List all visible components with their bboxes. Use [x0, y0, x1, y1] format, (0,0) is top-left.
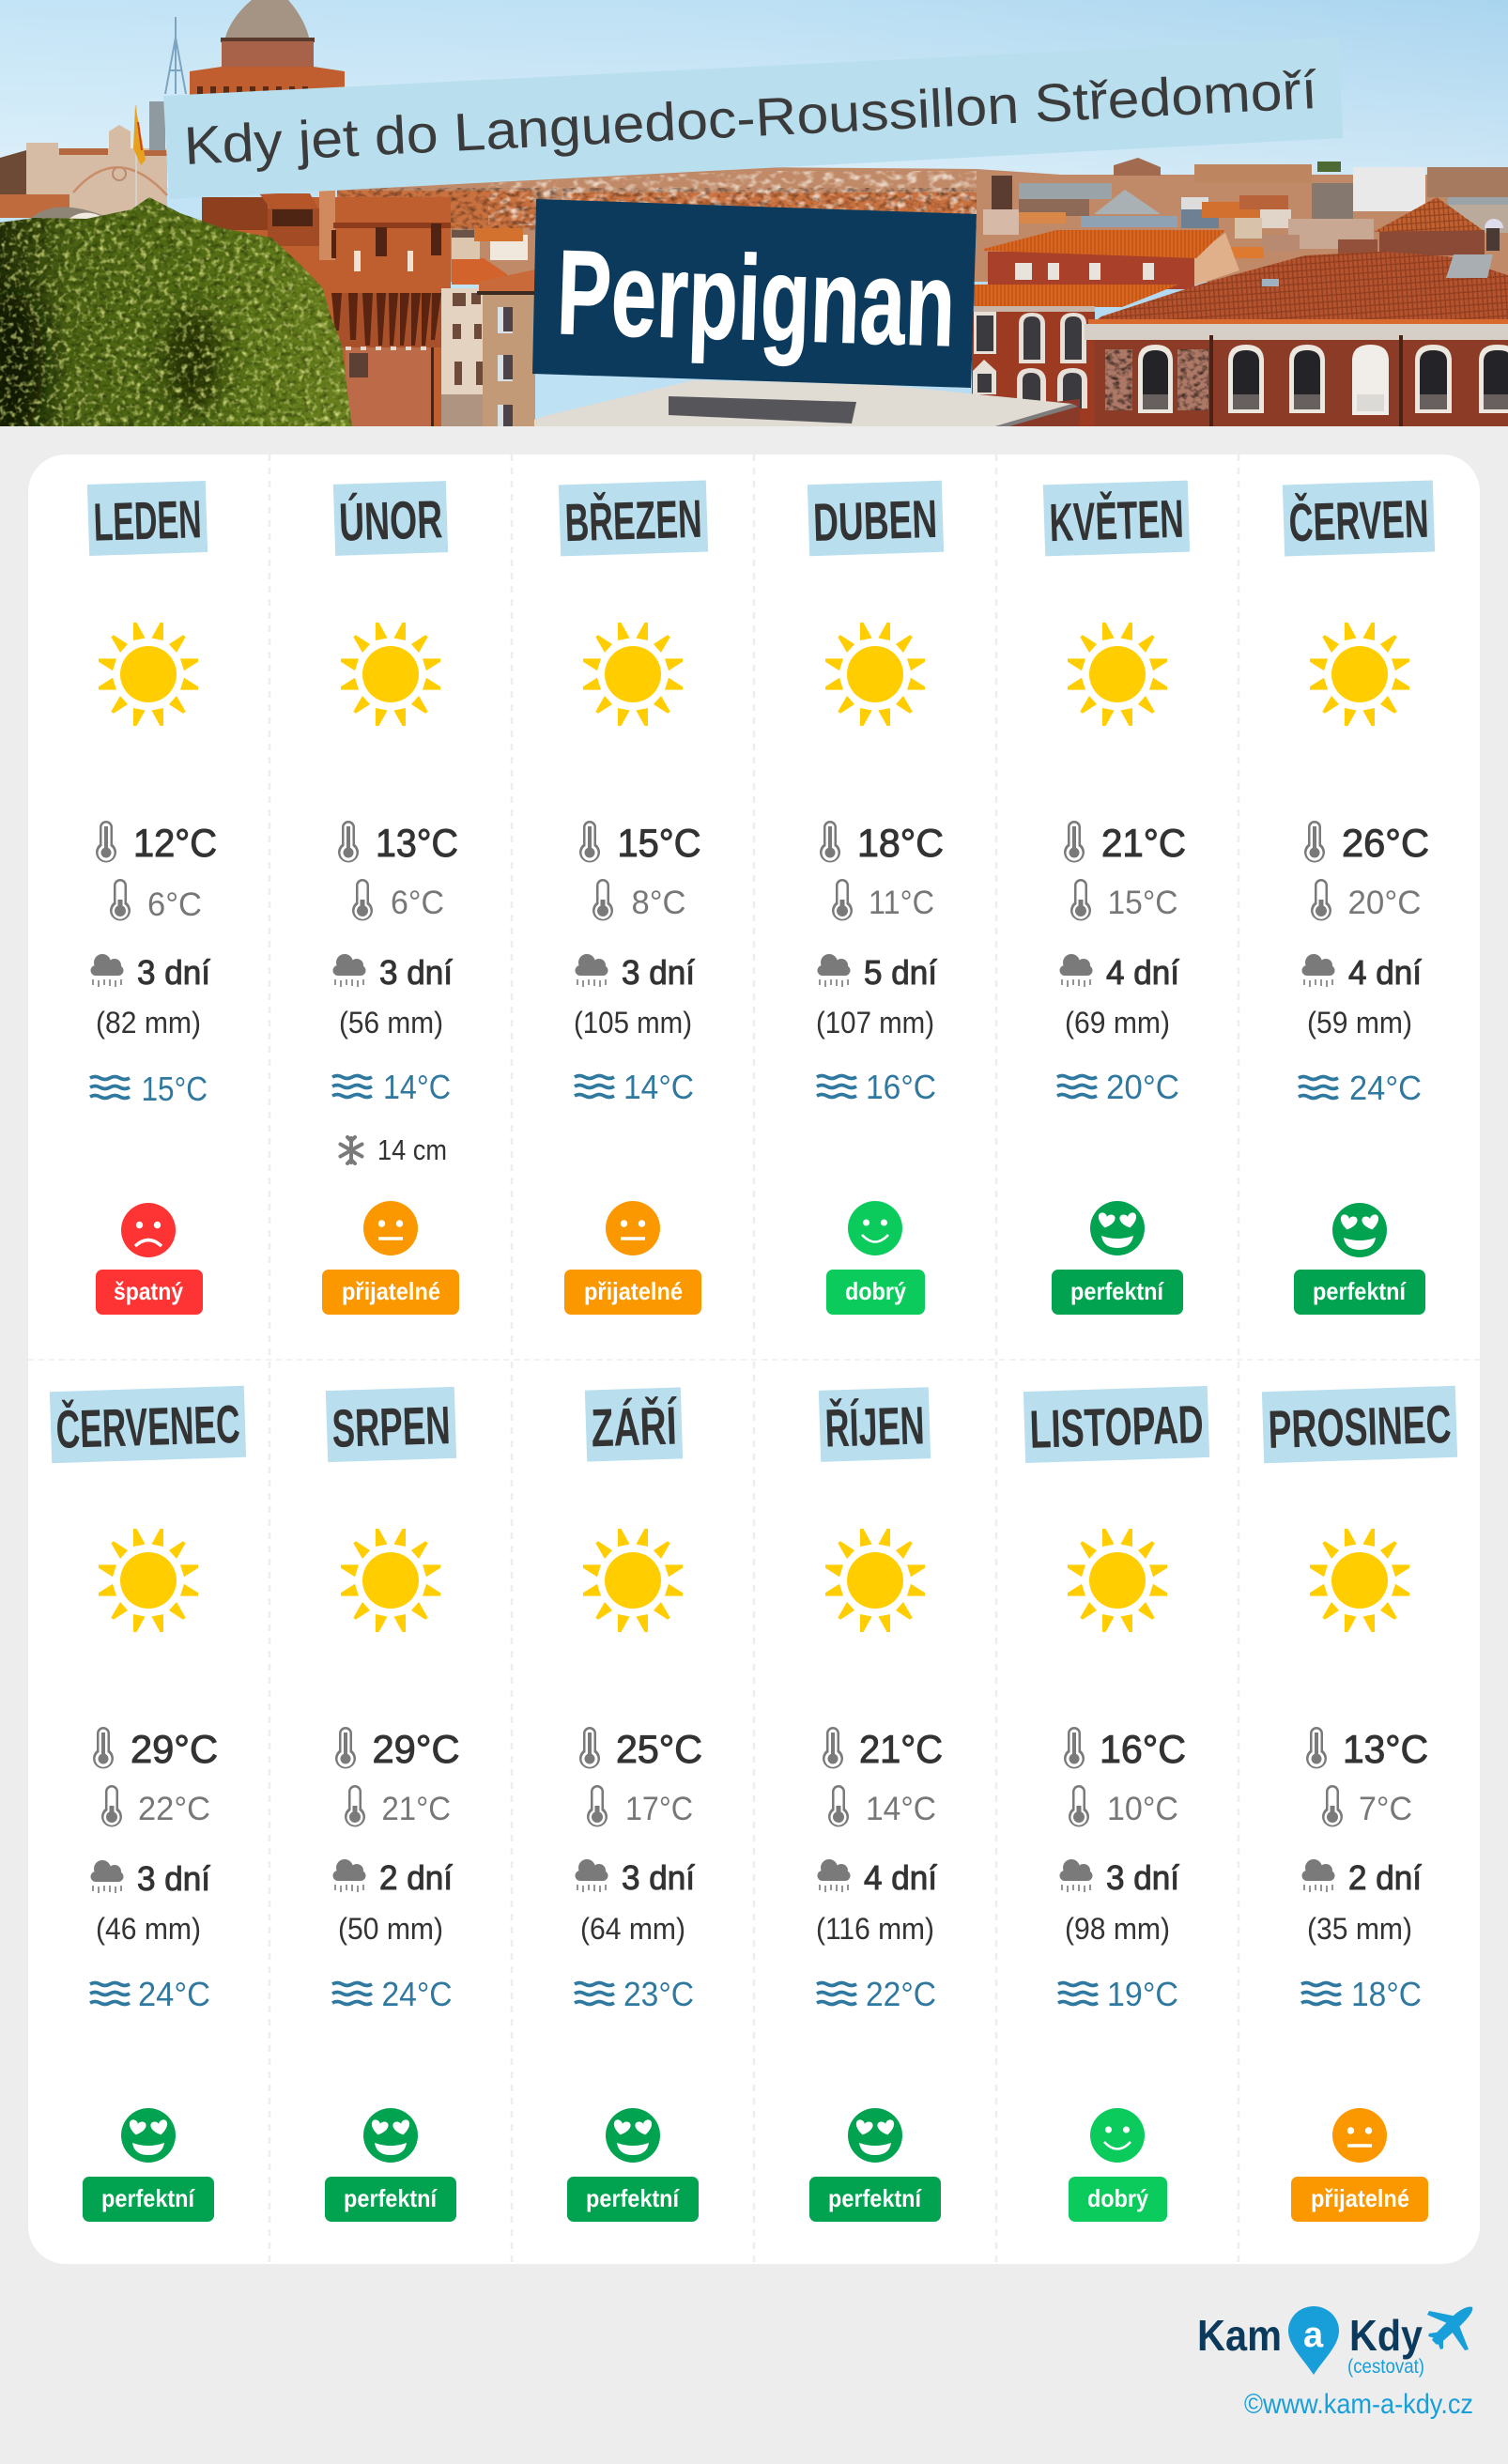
rating badge [1069, 2177, 1167, 2222]
rain days: 2 dní [379, 1858, 453, 1897]
rating badge [809, 2177, 941, 2222]
month: únor [322, 481, 459, 1315]
high temperature [823, 1727, 943, 1771]
rain days [90, 1859, 210, 1898]
rain days [1059, 953, 1179, 992]
low temperature [832, 879, 934, 921]
rain days: 5 dní [864, 953, 937, 992]
rating badge: přijatelné [342, 1277, 440, 1305]
rating badge [564, 1270, 701, 1315]
icon: sun [583, 623, 683, 726]
flat white roof [534, 380, 1080, 426]
icon: sun [825, 623, 925, 726]
sea temperature [817, 1068, 936, 1106]
subtitle banner [163, 38, 1343, 199]
smiley: neutral [1332, 2108, 1387, 2163]
icon: plane [1427, 2307, 1472, 2350]
heading: červenec: ČERVENEC [55, 1394, 241, 1460]
rain days [332, 1858, 453, 1897]
heading: říjen: ŘÍJEN [824, 1394, 926, 1459]
low temperature: 6°C [391, 885, 444, 921]
rating badge: perfektní [828, 2184, 922, 2212]
precipitation: (59 mm) [1307, 1006, 1412, 1040]
far town on the right skyline [983, 158, 1508, 261]
high temperature: 25°C [616, 1727, 702, 1771]
rain days: 3 dní [1106, 1858, 1179, 1897]
heading: únor: ÚNOR [338, 489, 443, 553]
sea temperature [1057, 1068, 1179, 1106]
rain days: 3 dní [137, 953, 210, 992]
sea temperature [1058, 1975, 1178, 2013]
low temperature: 20°C [1348, 885, 1422, 921]
precipitation: (69 mm) [1065, 1006, 1170, 1040]
month: červen [1283, 481, 1435, 1315]
castle wall [202, 191, 452, 426]
sea temperature: 24°C [138, 1975, 210, 2013]
sea temperature: 14°C [623, 1068, 694, 1106]
brick tower with dome [190, 0, 345, 98]
high temperature [1304, 821, 1429, 865]
icon: sun [341, 623, 440, 726]
rating badge: perfektní [586, 2184, 680, 2212]
precipitation: (46 mm) [96, 1912, 201, 1946]
rain days: 3 dní [622, 953, 695, 992]
icon: sun [341, 1529, 440, 1632]
sea temperature [1301, 1975, 1422, 2013]
rain days: 2 dní [1348, 1858, 1422, 1897]
month: duben [808, 481, 944, 1315]
rating badge [322, 1270, 459, 1315]
rain days [817, 953, 937, 992]
heading: duben: DUBEN [812, 489, 938, 553]
rating badge: přijatelné [1311, 2184, 1409, 2212]
smiley: good [1090, 2108, 1145, 2163]
low temperature: 7°C [1359, 1791, 1412, 1827]
rain days: 4 dní [1106, 953, 1179, 992]
heading: březen: BŘEZEN [564, 488, 703, 553]
sea temperature: 14°C [383, 1068, 451, 1106]
snow [340, 1133, 447, 1166]
high temperature [1306, 1727, 1428, 1771]
logo: Kam a Kdy: Kam [1197, 2311, 1282, 2360]
precipitation: (35 mm) [1307, 1912, 1412, 1946]
month: březen [559, 481, 708, 1315]
sea temperature: 19°C [1107, 1975, 1178, 2013]
orange roofs and brick buildings at right [972, 230, 1508, 426]
high temperature: 15°C [618, 821, 700, 865]
rating badge: dobrý [845, 1277, 906, 1305]
smiley: perfect [1090, 1201, 1145, 1255]
logo: Kam a Kdy: Kdy [1349, 2311, 1423, 2360]
heading: listopad [1023, 1386, 1209, 1463]
rating badge: perfektní [101, 2184, 195, 2212]
low temperature: 8°C [631, 885, 685, 921]
low temperature: 15°C [1108, 885, 1177, 921]
hero photo: Perpignan rooftops [0, 0, 1508, 441]
flag [133, 105, 146, 214]
icon: sun [1068, 623, 1167, 726]
low temperature [1069, 1785, 1178, 1827]
rain days: 3 dní [379, 953, 453, 992]
antenna [165, 17, 186, 94]
title banner: Perpignan [532, 199, 977, 388]
heading: září: ZÁŘÍ [591, 1395, 679, 1458]
rain days: 4 dní [1348, 953, 1422, 992]
low temperature: 21°C [381, 1791, 451, 1827]
high temperature: 29°C [372, 1727, 460, 1771]
high temperature: 16°C [1100, 1727, 1186, 1771]
sea temperature [332, 1975, 453, 2013]
rating badge: perfektní [1313, 1277, 1407, 1305]
high temperature [96, 821, 217, 865]
precipitation: (64 mm) [580, 1912, 685, 1946]
high temperature [579, 1727, 702, 1771]
rain days [575, 1858, 695, 1897]
heading: leden [87, 481, 208, 556]
month: prosinec [1262, 1386, 1457, 2222]
rain days [1301, 953, 1422, 992]
high temperature: 13°C [376, 821, 458, 865]
sea temperature: 18°C [1351, 1975, 1422, 2013]
rating badge [567, 2177, 699, 2222]
heading: březen [559, 481, 708, 556]
sea temperature: 22°C [866, 1975, 936, 2013]
smiley: perfect [606, 2108, 660, 2163]
rain days [817, 1858, 937, 1897]
website credit: ©www.kam-a-kdy.cz [1244, 2389, 1473, 2420]
month: červenec [50, 1386, 246, 2222]
low temperature: 11°C [869, 885, 934, 921]
low temperature [352, 879, 444, 921]
precipitation: (105 mm) [574, 1006, 692, 1040]
high temperature [579, 821, 700, 865]
low temperature [345, 1785, 451, 1827]
rating badge [1294, 1270, 1425, 1315]
rating badge: špatný [114, 1277, 183, 1305]
rain days [575, 953, 695, 992]
rain days [1301, 1858, 1422, 1897]
low temperature: 6°C [147, 886, 202, 923]
precipitation: (116 mm) [816, 1912, 934, 1946]
heading: květen [1043, 481, 1190, 556]
precipitation: (107 mm) [816, 1006, 934, 1040]
rating badge: perfektní [1070, 1277, 1164, 1305]
heading: květen: KVĚTEN [1049, 488, 1185, 553]
sea temperature: 24°C [381, 1975, 453, 2013]
sea temperature: 15°C [141, 1070, 208, 1108]
low temperature [1070, 879, 1177, 921]
low temperature [101, 1785, 210, 1827]
low temperature: 22°C [138, 1791, 210, 1827]
heading: červenec [50, 1386, 246, 1463]
high temperature: 26°C [1342, 821, 1429, 865]
sea temperature [1299, 1069, 1422, 1107]
rating badge [1052, 1270, 1183, 1315]
rating badge: perfektní [344, 2184, 438, 2212]
smiley: perfect [1332, 1203, 1387, 1257]
smiley: neutral [363, 1201, 418, 1255]
icon: sun [1310, 623, 1409, 726]
smiley: neutral [606, 1201, 660, 1255]
title banner: Perpignan: Perpignan [555, 225, 957, 372]
precipitation: (56 mm) [339, 1006, 443, 1040]
rating badge: přijatelné [584, 1277, 683, 1305]
icon: sun [99, 623, 198, 726]
icon: sun [1310, 1529, 1409, 1632]
rating badge [1291, 2177, 1428, 2222]
high temperature [335, 1727, 460, 1771]
rain days: 3 dní [622, 1858, 695, 1897]
heading: srpen: SRPEN [331, 1395, 452, 1459]
sea temperature: 16°C [866, 1068, 936, 1106]
high temperature [338, 821, 458, 865]
low temperature [828, 1785, 936, 1827]
cathedral at left [0, 101, 167, 222]
tan townhouse [441, 228, 535, 426]
sea temperature [90, 1975, 210, 2013]
heading: duben [808, 481, 944, 556]
snow: 14 cm [377, 1133, 447, 1166]
icon: sun [825, 1529, 925, 1632]
subtitle banner: Kdy jet do Languedoc-Roussillon Středomoří [182, 60, 1318, 177]
smiley: bad [121, 1203, 176, 1257]
high temperature [1064, 1727, 1186, 1771]
high temperature [1064, 821, 1186, 865]
sea temperature [575, 1975, 694, 2013]
low temperature [1322, 1785, 1412, 1827]
rating badge [83, 2177, 214, 2222]
heading: říjen [819, 1387, 931, 1462]
precipitation: (98 mm) [1065, 1912, 1170, 1946]
heading: listopad: LISTOPAD [1029, 1394, 1205, 1460]
month: listopad [1023, 1386, 1209, 2222]
high temperature: 29°C [131, 1727, 218, 1771]
smiley: perfect [121, 2108, 176, 2163]
low temperature [587, 1785, 693, 1827]
sea temperature: 23°C [623, 1975, 694, 2013]
heading: září [585, 1387, 683, 1462]
high temperature: 18°C [857, 821, 944, 865]
rating badge [325, 2177, 456, 2222]
smiley: perfect [363, 2108, 418, 2163]
month: leden [87, 481, 217, 1315]
low temperature: 10°C [1107, 1791, 1178, 1827]
smiley: good [848, 1201, 902, 1255]
high temperature: 13°C [1343, 1727, 1428, 1771]
icon: map pin: a [1303, 2316, 1324, 2355]
sea temperature [332, 1068, 451, 1106]
heading: červen: ČERVEN [1288, 488, 1430, 553]
icon: map pin [1288, 2306, 1339, 2375]
rain days [90, 953, 210, 992]
sea temperature [817, 1975, 936, 2013]
rain days: 4 dní [864, 1858, 937, 1897]
logo: Kam a Kdy [1197, 2306, 1472, 2378]
high temperature: 21°C [1101, 821, 1186, 865]
precipitation: (82 mm) [96, 1006, 201, 1040]
brick detail patches [1105, 349, 1208, 410]
rain days [332, 953, 453, 992]
low temperature [592, 879, 685, 921]
high temperature: 12°C [133, 821, 217, 865]
middle town roofs [337, 167, 1508, 282]
month: srpen [325, 1387, 460, 2222]
heading: srpen [326, 1387, 456, 1462]
logo: Kam a Kdy: (cestovat) [1347, 2356, 1424, 2378]
tree [0, 192, 357, 441]
rain days [1059, 1858, 1179, 1897]
icon: sun [583, 1529, 683, 1632]
sea temperature: 20°C [1106, 1068, 1179, 1106]
low temperature [110, 879, 202, 923]
sea temperature: 24°C [1349, 1069, 1422, 1107]
sea temperature [90, 1070, 208, 1108]
high temperature [93, 1727, 218, 1771]
icon: sun [1068, 1529, 1167, 1632]
arched windows [1138, 335, 1508, 426]
rating badge [96, 1270, 203, 1315]
sea temperature [575, 1068, 694, 1106]
low temperature: 14°C [866, 1791, 936, 1827]
month: říjen [809, 1387, 943, 2222]
low temperature [1311, 879, 1422, 921]
rating badge: dobrý [1087, 2184, 1148, 2212]
heading: leden: LEDEN [93, 489, 203, 553]
low temperature: 17°C [625, 1791, 693, 1827]
high temperature [820, 821, 944, 865]
month: květen [1043, 481, 1190, 1315]
heading: únor [333, 481, 448, 556]
rating badge [826, 1270, 925, 1315]
heading: červen [1283, 481, 1435, 556]
high temperature: 21°C [859, 1727, 943, 1771]
precipitation: (50 mm) [338, 1912, 443, 1946]
smiley: perfect [848, 2108, 902, 2163]
icon: sun [99, 1529, 198, 1632]
month: září [567, 1387, 702, 2222]
rain days: 3 dní [137, 1859, 210, 1898]
calendar panel [28, 454, 1480, 2264]
